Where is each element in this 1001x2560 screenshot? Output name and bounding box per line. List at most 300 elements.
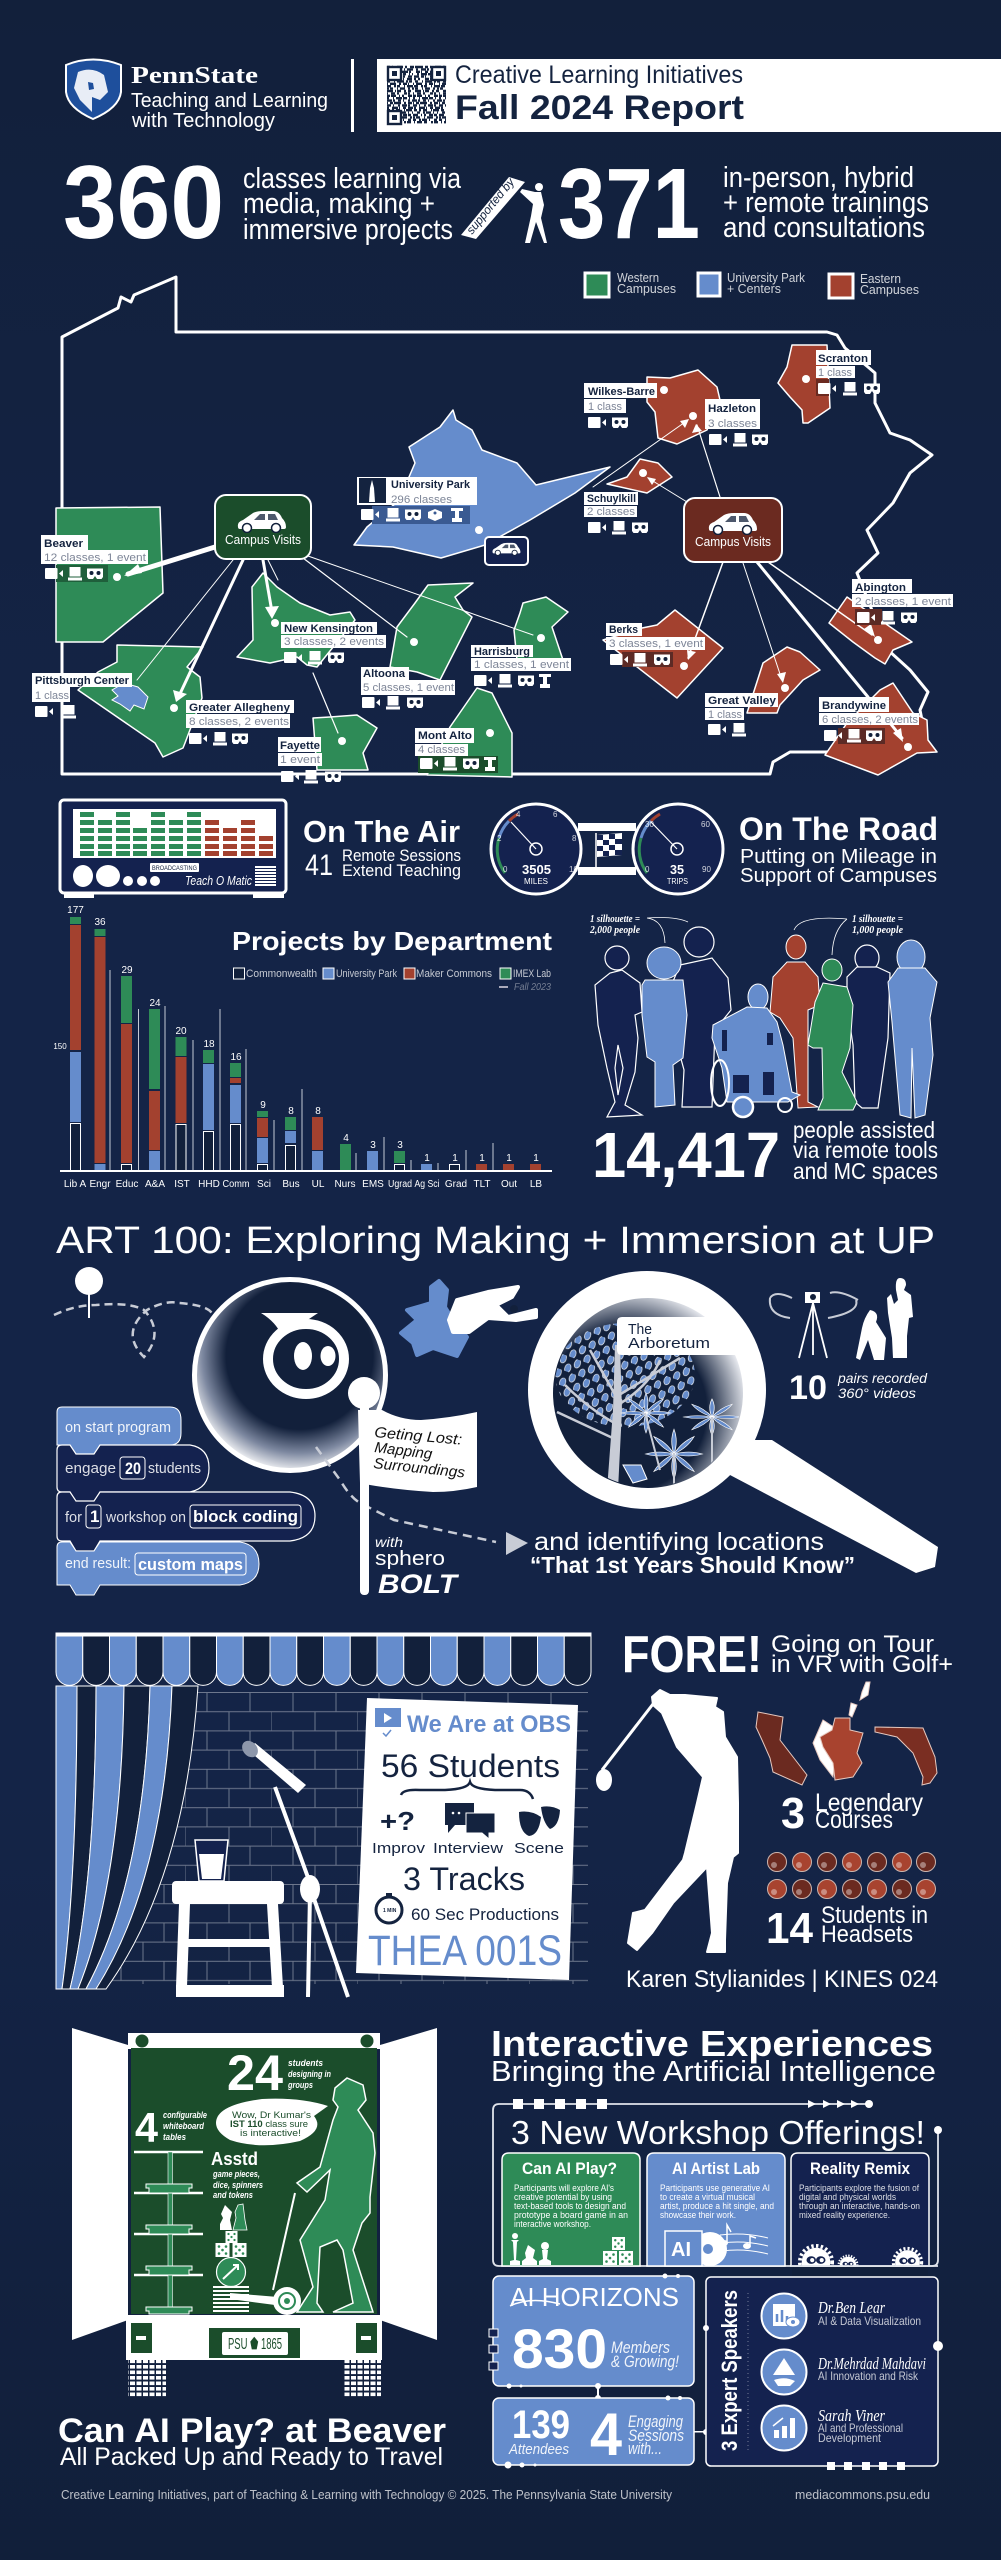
stat: 3 legendary courses [781, 1789, 923, 1838]
chart legend: Commonwealth [246, 968, 317, 980]
label: Wilkes-Barre [584, 383, 657, 428]
label: Pittsburgh Center: 1 class [35, 690, 69, 702]
chart legend: University Park [336, 968, 397, 980]
card: Can AI Play: interactive workshop. [514, 2219, 591, 2229]
heading: workshop offerings: 3 New Workshop Offerings! [511, 2114, 925, 2151]
speaker: Sarah Viner: Sarah Viner [818, 2406, 885, 2425]
sphero bolt logo: with [375, 1534, 403, 1550]
stat: 24 students: groups [287, 2080, 313, 2090]
card: Reality Remix [791, 2153, 938, 2281]
label: New Kensington [281, 622, 386, 664]
block: end result: end result: [65, 1555, 131, 1572]
label: Fayette: Fayette [280, 740, 320, 752]
heading: On The Air [303, 814, 461, 882]
panel: AI Horizons: AI HORIZONS [510, 2282, 679, 2312]
speaker: Mehrdad Mahdavi: Dr.Mehrdad Mahdavi [817, 2354, 926, 2373]
campus visits west [215, 495, 311, 559]
heading: On The Road: Support of Campuses [740, 865, 937, 887]
brick wall [100, 1692, 588, 1984]
card: AI Artist Lab: artist, produce a hit single, and [660, 2201, 774, 2211]
county shapes [56, 345, 937, 777]
outlined person back [665, 927, 731, 1107]
label: Berks: Berks [609, 624, 638, 636]
license plate: PSU ⬟ 1865 [228, 2336, 282, 2353]
panel: AI Horizons: 830 [512, 2317, 607, 2380]
block: for workshop: block coding [193, 1507, 298, 1526]
block: engage: engage [65, 1460, 116, 1477]
heading: On The Road: On The Road [739, 811, 938, 847]
gauge: miles: 3505 [522, 862, 551, 877]
icon: course states [756, 1682, 937, 1785]
bar values: 1 [452, 1153, 458, 1164]
icons: improv interview scene: +? [380, 1806, 415, 1836]
department labels: Grad [445, 1179, 467, 1190]
bar values: 8 [288, 1106, 294, 1117]
panel: attendees and sessions: Engaging [628, 2412, 683, 2431]
silhouette key: 2,000 people [589, 925, 641, 936]
map legend: Campuses [860, 282, 919, 297]
microphone stand [239, 1738, 348, 1997]
gauge: miles: 4 [516, 810, 521, 819]
card: Reality Remix: Reality Remix [810, 2159, 910, 2178]
bar values: 4 [343, 1133, 349, 1144]
stat: 14 students: Headsets [821, 1921, 913, 1948]
label: Hazleton: 3 classes [708, 418, 758, 430]
block: engage: 20 [125, 1459, 141, 1478]
department labels: Lib A [64, 1179, 86, 1190]
stat: 24 students: 24 [227, 2045, 283, 2101]
label: Greater Allegheny: 8 classes, 2 events [189, 716, 290, 728]
delivery truck [72, 2028, 437, 2398]
stat: 10 pairs: 10 [789, 1369, 827, 1407]
gauge: trips: 60 [701, 820, 710, 829]
label: Greater Allegheny: Greater Allegheny [189, 702, 291, 714]
map legend [585, 270, 919, 298]
label: Harrisburg [471, 645, 571, 688]
label: Great Valley: 1 class [708, 709, 742, 721]
card: AI Artist Lab: to create a virtual musical [660, 2192, 755, 2202]
label: Beaver [41, 535, 148, 582]
outlined person far left [595, 946, 642, 1117]
icon: map pin with dashed path [54, 1267, 227, 1357]
caption: identifying locations: and identifying locations [534, 1528, 824, 1556]
code blocks [57, 1407, 315, 1595]
speaker: Sarah Viner: AI and Professional [818, 2421, 903, 2435]
stat: 371 trainings: 371 [558, 148, 700, 260]
awning [56, 1633, 591, 1685]
assorted pieces text [211, 2149, 263, 2200]
stat: 3 legendary courses: Legendary [815, 1789, 923, 1817]
chart legend: Fall 2023 [514, 982, 551, 993]
label: Abington [852, 579, 953, 625]
gauge: trips: 0 [645, 865, 650, 874]
whiteboard tables stand [134, 2152, 203, 2314]
icons: game pieces [213, 2204, 249, 2311]
label: Pittsburgh Center [32, 673, 132, 718]
stat: 10 pairs: 360° videos [838, 1385, 916, 1401]
stat: 371 trainings [558, 148, 929, 260]
icon: Penn State shield [66, 60, 121, 119]
silhouette key: 1,000 people [852, 925, 904, 936]
poster: We Are at OBS: 60 Sec Productions [411, 1905, 559, 1924]
stat: 14,417 people: via remote tools [793, 1137, 938, 1163]
panel: AI Horizons [489, 2274, 694, 2401]
icon: video badge [375, 1708, 401, 1736]
department labels: A&A [145, 1179, 165, 1190]
card: AI Artist Lab: Participants use generative AI [660, 2183, 770, 2193]
logo text: Teaching and Learning [131, 90, 328, 112]
campus visits east: Campus Visits [695, 534, 771, 549]
stat: 3 legendary courses: Courses [815, 1806, 893, 1834]
label: University Park: University Park [391, 479, 471, 491]
poster: We Are at OBS: 3 Tracks [403, 1861, 525, 1897]
magnifier: arboretum [528, 1271, 938, 1573]
silhouette key: 1 silhouette = [852, 914, 903, 925]
speaker: Sarah Viner [762, 2406, 903, 2450]
label: Harrisburg: Harrisburg [474, 646, 530, 658]
department labels: HHD [198, 1179, 220, 1190]
dashboard gauges [491, 804, 723, 894]
stage scene [56, 1633, 591, 1997]
stat: 4 tables: tables [163, 2132, 186, 2142]
department labels: Ag Sci [414, 1179, 440, 1190]
department labels: Nurs [334, 1179, 356, 1190]
label: Fayette [278, 737, 341, 784]
blue person [642, 947, 687, 1107]
icon: paint splats [401, 1281, 536, 1356]
heading: FORE: FORE! [622, 1626, 762, 1684]
block: end result: custom maps [138, 1555, 243, 1574]
department labels: Educ [116, 1179, 138, 1190]
panel: attendees and sessions: Sessions [628, 2426, 684, 2445]
bar values: 16 [230, 1052, 242, 1063]
chart title: Projects by Department [232, 926, 552, 956]
knobs [73, 865, 160, 887]
sphero bolt logo: BOLT [378, 1569, 460, 1599]
department labels: Out [501, 1179, 517, 1190]
bar values: 8 [315, 1106, 321, 1117]
icon: QR code [386, 65, 446, 125]
department labels: EMS [362, 1179, 384, 1190]
poster: We Are at OBS: THEA 001S [368, 1927, 562, 1975]
title panel [377, 59, 1001, 132]
flag with title [348, 1377, 477, 1595]
map legend: Western [617, 270, 659, 285]
panel: AI Horizons: Members [611, 2338, 670, 2357]
block: on start [57, 1407, 181, 1455]
card: Reality Remix: through an interactive, hands-on [799, 2201, 920, 2211]
chart legend: IMEX Lab [513, 968, 551, 980]
card: Can AI Play: creative potential by using [514, 2192, 612, 2202]
icon: stopwatch [376, 1893, 402, 1923]
block: for workshop: 1 [90, 1507, 99, 1526]
bar values: 150 [53, 1042, 67, 1051]
label: Berks [606, 623, 705, 667]
card: AI Artist Lab: AI Artist Lab [672, 2159, 760, 2178]
wheelchair user [711, 984, 800, 1117]
card: Reality Remix: Participants explore the fusion of [799, 2183, 919, 2193]
logo text: with Technology [131, 110, 275, 132]
heading: FORE: in VR with Golf+ [771, 1651, 953, 1678]
stat: 24 students: students [288, 2058, 323, 2068]
label: Abington: 2 classes, 1 event [855, 596, 951, 608]
bar values [53, 905, 539, 1164]
poster: We Are at OBS: Interview [433, 1840, 503, 1857]
map legend: Campuses [617, 281, 676, 296]
stat: 14,417 people: and MC spaces [793, 1158, 938, 1184]
stat: 360 classes: immersive projects [243, 214, 453, 246]
gauge: trips [633, 804, 723, 894]
panel: AI Horizons: & Growing! [611, 2352, 679, 2371]
card: Can AI Play: Participants will explore AI's [514, 2183, 614, 2193]
bar values: 20 [175, 1026, 187, 1037]
gauge: miles [491, 804, 581, 894]
bar values: 1 [533, 1153, 539, 1164]
speech bubble [216, 2099, 328, 2145]
bar values: 3 [397, 1140, 403, 1151]
bars [70, 917, 541, 1170]
bar values: 24 [149, 998, 161, 1009]
heading: Interactive Experiences: Interactive Experiences [491, 2023, 933, 2064]
icon: sphero eye [261, 1313, 344, 1394]
label: Pittsburgh Center: Pittsburgh Center [35, 675, 130, 687]
label: University Park [357, 477, 477, 524]
block: for workshop [57, 1492, 315, 1551]
magnifier: sphero robot [194, 1280, 386, 1470]
label: Schuylkill: Schuylkill [587, 493, 636, 505]
stat: 371 trainings: and consultations [723, 212, 925, 244]
label: Wilkes-Barre: Wilkes-Barre [588, 386, 655, 398]
heading: Can AI Play at Beaver: All Packed Up and Ready to Travel [60, 2443, 443, 2471]
department labels: Bus [282, 1179, 300, 1190]
red person [770, 935, 820, 1108]
campus visits east [684, 498, 782, 562]
green person [808, 959, 857, 1110]
panel: attendees and sessions: 139 [512, 2403, 570, 2447]
gauge: trips: 30 [645, 820, 654, 829]
curtain [56, 1686, 198, 1989]
stat: 4 tables [135, 2104, 207, 2151]
heading: On The Air: 41 [305, 849, 333, 882]
broadcasting badge: BROADCASTING [152, 866, 197, 872]
stat: 360 classes: classes learning via [243, 163, 462, 195]
department labels: IST [174, 1179, 190, 1190]
label: Brandywine: Brandywine [822, 700, 886, 712]
card: AI Artist Lab [647, 2153, 785, 2266]
icon: golfer silhouette [596, 1690, 738, 1952]
panel: expert speakers [703, 2277, 943, 2470]
label: Schuylkill: 2 classes [587, 506, 636, 518]
icon: tripod and camera crew [770, 1278, 913, 1360]
bar chart: projects by department [53, 905, 552, 1190]
state outline [62, 277, 932, 774]
panel: attendees and sessions: with... [628, 2439, 662, 2458]
label: Beaver: 12 classes, 1 event [44, 552, 146, 564]
panel: attendees and sessions: 4 [590, 2401, 623, 2468]
assorted pieces text: game pieces, [212, 2169, 260, 2179]
route lines [128, 420, 902, 738]
flag with title: Mapping [374, 1439, 434, 1463]
report title text [455, 61, 744, 127]
stat: 14 students: Students in [821, 1902, 928, 1929]
card: Can AI Play [502, 2153, 640, 2266]
assorted pieces text: and tokens [213, 2190, 253, 2200]
arboretum label [617, 1317, 741, 1355]
heading: On The Road [739, 811, 938, 887]
label: Mont Alto: 4 classes [418, 744, 466, 756]
gauge: miles: 0 [503, 865, 508, 874]
department labels [64, 1179, 542, 1190]
footer: mediacommons.psu.edu [795, 2487, 930, 2502]
caption: identifying locations [530, 1528, 855, 1578]
label: Harrisburg: 1 classes, 1 event [474, 659, 569, 671]
radio brand: Teach O Matic [185, 873, 252, 888]
bar values: 1 [479, 1153, 485, 1164]
dashed route arrow [316, 1447, 528, 1555]
label: Wilkes-Barre: 1 class [588, 401, 622, 413]
arboretum label: Arboretum [628, 1335, 710, 1352]
people silhouettes [589, 914, 937, 1118]
heading: Can AI Play at Beaver: Can AI Play? at Beaver [58, 2412, 446, 2450]
bar values: 9 [260, 1100, 266, 1111]
tall blue person [888, 940, 937, 1118]
label: Hazleton: Hazleton [708, 403, 756, 415]
department labels: Comm [222, 1179, 250, 1190]
speaker: Ben Lear: Dr.Ben Lear [817, 2298, 885, 2317]
icons: improv interview scene [380, 1803, 560, 1839]
gauge: miles: 6 [553, 810, 558, 819]
block: on start: on start program [65, 1419, 171, 1436]
heading: On The Air: Remote Sessions [342, 846, 461, 865]
assorted pieces text: Asstd [211, 2149, 258, 2169]
block: engage: students [148, 1460, 201, 1477]
department labels: Engr [89, 1179, 111, 1190]
report title text: Creative Learning Initiatives [455, 61, 743, 89]
label: Hazleton [705, 399, 768, 446]
license plate [209, 2328, 300, 2358]
bar values: 29 [121, 965, 133, 976]
heading: On The Road: Putting on Mileage in [740, 846, 937, 868]
label: Mont Alto: Mont Alto [418, 730, 472, 742]
block: for workshop: workshop on [105, 1509, 186, 1526]
icon: checkered flag [596, 833, 622, 868]
stat: 14 students: 14 [766, 1904, 813, 1953]
card: Reality Remix: digital and physical worlds [799, 2192, 896, 2202]
label: Beaver: Beaver [44, 538, 84, 550]
stat: 360 classes: 360 [63, 145, 224, 261]
credit: Karen Stylianides: Karen Stylianides | KINES 024 [626, 1966, 938, 1993]
campus dots [113, 375, 912, 751]
stat: 14 students [766, 1902, 928, 1953]
label: Altoona: 5 classes, 1 event [363, 682, 454, 694]
fall 2023 markers [110, 970, 493, 1170]
label: Great Valley [705, 693, 778, 736]
silhouette key: 1 silhouette = [590, 914, 640, 925]
label: Schuylkill [584, 492, 648, 534]
bar values: 36 [94, 917, 106, 928]
map legend: University Park [727, 270, 805, 285]
speaker: Ben Lear [762, 2294, 921, 2338]
gauge: miles: 8 [572, 834, 577, 843]
outlined person right [847, 945, 890, 1108]
chart legend [234, 968, 551, 993]
bar values: 3 [370, 1140, 376, 1151]
department labels: LB [530, 1179, 542, 1190]
icons: fuzzy creatures [791, 2246, 938, 2281]
logo text: PennState [131, 63, 258, 89]
label: Berks: 3 classes, 1 event [609, 638, 703, 650]
label: Scranton: 1 class [818, 367, 852, 379]
tree and plants [555, 1323, 740, 1490]
bar values: 1 [506, 1153, 512, 1164]
stat: 14,417 people [592, 1117, 938, 1191]
poster: We Are at OBS: We Are at OBS [407, 1711, 571, 1738]
circuit frame: workshops [493, 2099, 942, 2281]
label: New Kensington: New Kensington [284, 623, 373, 635]
heading: Interactive Experiences [491, 2023, 936, 2088]
department labels: Ugrad [388, 1179, 412, 1190]
level bars [80, 812, 201, 856]
label: New Kensington: 3 classes, 2 events [284, 636, 385, 648]
icon: stopwatch: 1 MIN [383, 1908, 397, 1914]
stat: 4 tables: configurable [163, 2110, 207, 2120]
campus visits west: Campus Visits [225, 532, 301, 547]
card: Can AI Play: text-based tools to design and [514, 2201, 626, 2211]
Pennsylvania map [32, 277, 953, 784]
speaker: Ben Lear: AI & Data Visualization [818, 2314, 921, 2328]
label: Great Valley: Great Valley [708, 695, 777, 707]
arboretum label: The [628, 1321, 652, 1338]
block: for workshop: for [65, 1509, 82, 1526]
person pushing hand cart [230, 2078, 375, 2315]
stat: 10 pairs: pairs recorded [837, 1370, 928, 1386]
truck doors and body [72, 2028, 437, 2360]
stat: 10 pairs [789, 1369, 928, 1407]
heading: Can AI Play at Beaver [58, 2412, 446, 2471]
poster: We Are at OBS: 56 Students [381, 1748, 560, 1784]
card: Reality Remix: mixed reality experience. [799, 2210, 890, 2220]
panel: expert speakers: 3 Expert Speakers [717, 2290, 742, 2451]
assorted pieces text: dice, spinners [213, 2180, 263, 2190]
department labels: UL [312, 1179, 325, 1190]
label: Altoona [361, 667, 455, 710]
flag with title: Surroundings [373, 1455, 466, 1482]
gauge: trips: 90 [702, 865, 711, 874]
icons: chess and dice [510, 2233, 633, 2265]
heading: Interactive Experiences: Bringing the Artificial Intelligence [491, 2056, 936, 2088]
speaker: Sarah Viner: Development [818, 2431, 882, 2445]
heading: On The Air: Extend Teaching [342, 861, 461, 880]
speaker: Mehrdad Mahdavi: AI Innovation and Risk [818, 2369, 919, 2383]
map legend: + Centers [727, 281, 781, 296]
heading: FORE: Going on Tour [771, 1631, 934, 1658]
poster: We Are at OBS [356, 1698, 578, 1980]
stat: 14,417 people: 14,417 [592, 1119, 780, 1191]
truck tail lights [131, 2323, 377, 2353]
speech bubble: is interactive! [240, 2128, 301, 2138]
tires [128, 2360, 381, 2398]
block: engage [57, 1445, 209, 1502]
label: Scranton [816, 350, 880, 396]
logo text [131, 63, 328, 132]
label: University Park: 296 classes [391, 494, 453, 506]
poster: We Are at OBS: Scene [514, 1840, 564, 1857]
stat: 3 legendary courses: 3 [781, 1789, 805, 1838]
chart legend: Maker Commons [416, 968, 492, 980]
sphero bolt logo: sphero [375, 1548, 445, 1570]
stat: 24 students: designing in [288, 2069, 331, 2079]
bar values: 18 [203, 1039, 215, 1050]
